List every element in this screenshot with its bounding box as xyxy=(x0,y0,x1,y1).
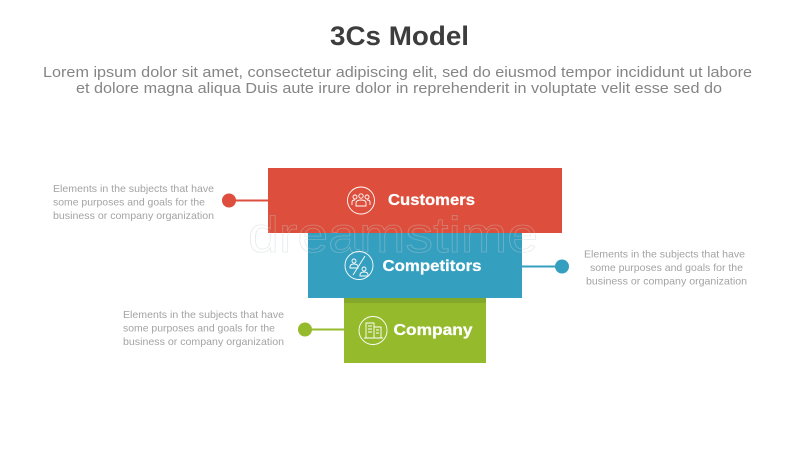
panel: customers xyxy=(222,168,562,233)
description: competitors: Elements in the subjects that have xyxy=(584,248,745,260)
label: competitors: Competitors xyxy=(382,258,482,275)
subtitle: Lorem ipsum dolor sit amet, consectetur adipiscing elit, sed do eiusmod tempor incididunt ut labore xyxy=(43,64,752,81)
label: company: Company xyxy=(394,322,473,339)
panel: competitors xyxy=(308,233,569,298)
description: customers: business or company organization xyxy=(53,210,214,222)
watermark: dreamstime xyxy=(248,207,538,263)
description: company: business or company organization xyxy=(123,336,284,348)
icon: competitors xyxy=(345,252,373,280)
description: company: Elements in the subjects that have xyxy=(123,309,284,321)
connector: customers xyxy=(222,194,268,208)
label: customers: Customers xyxy=(388,192,475,209)
subtitle: et dolore magna aliqua Duis aute irure dolor in reprehenderit in voluptate velit esse sed do xyxy=(76,80,722,97)
icon: customers xyxy=(348,187,374,214)
description: company: some purposes and goals for the xyxy=(123,322,275,334)
icon: company xyxy=(359,316,387,344)
panel: company xyxy=(298,298,486,363)
connector: company xyxy=(298,322,344,336)
title: 3Cs Model xyxy=(330,21,469,51)
description: competitors: business or company organization xyxy=(586,276,747,288)
description: customers xyxy=(53,183,214,222)
connector: competitors xyxy=(522,260,569,274)
subtitle xyxy=(43,64,752,97)
description: competitors xyxy=(584,248,747,288)
description: customers: some purposes and goals for the xyxy=(53,196,205,208)
description: competitors: some purposes and goals for the xyxy=(590,262,743,274)
description: customers: Elements in the subjects that have xyxy=(53,183,214,195)
description: company xyxy=(123,309,284,348)
